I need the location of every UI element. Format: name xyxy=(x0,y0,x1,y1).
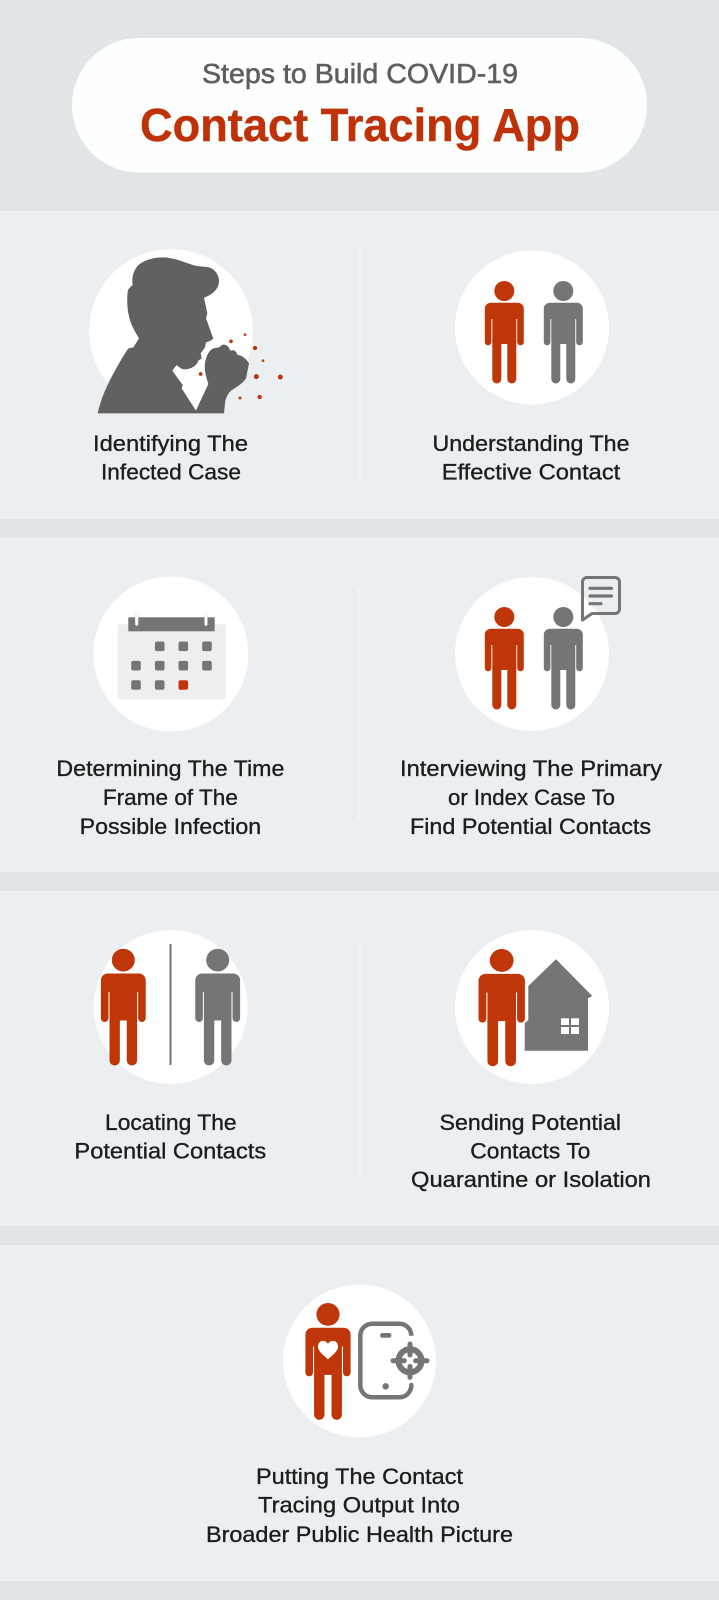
panel: row 4 xyxy=(0,1245,719,1581)
step: putting output into public health picture xyxy=(206,1284,513,1547)
label: Broader Public Health Picture xyxy=(206,1522,513,1547)
label xyxy=(206,1464,513,1547)
label: Sending Potential xyxy=(440,1110,621,1135)
label: Determining The Time xyxy=(56,756,284,781)
label xyxy=(74,1110,266,1164)
label: Locating The xyxy=(105,1110,237,1135)
label: Find Potential Contacts xyxy=(410,814,651,839)
label: Frame of The xyxy=(103,785,238,810)
panel: row 2 xyxy=(0,538,719,872)
icon: person with heart and phone with target xyxy=(283,1284,436,1438)
label: or Index Case To xyxy=(448,785,615,810)
label: Contacts To xyxy=(470,1139,590,1164)
icon: coughing man xyxy=(89,249,283,413)
icon: two people xyxy=(455,250,609,404)
title: subtitle line: Steps to Build COVID-19 xyxy=(202,58,518,89)
label xyxy=(432,431,630,484)
step: sending contacts to quarantine xyxy=(411,930,651,1192)
title banner xyxy=(72,38,647,172)
icon: calendar xyxy=(93,576,248,732)
label: Identifying The xyxy=(93,431,248,456)
label xyxy=(56,756,284,839)
icon: person and house xyxy=(455,930,609,1084)
label: Putting The Contact xyxy=(256,1464,464,1489)
icon: two people with speech bubble xyxy=(455,577,620,731)
label xyxy=(411,1110,651,1192)
title: main heading: Contact Tracing App xyxy=(140,99,580,151)
step: determining the time frame xyxy=(56,576,284,839)
panel: row 3 xyxy=(0,891,719,1226)
step: locating the potential contacts xyxy=(74,930,266,1164)
label: Quarantine or Isolation xyxy=(411,1167,651,1192)
step: understanding the effective contact xyxy=(432,250,630,484)
label: Potential Contacts xyxy=(74,1139,266,1164)
label: Effective Contact xyxy=(442,460,621,484)
label: Interviewing The Primary xyxy=(400,756,663,781)
label: Understanding The xyxy=(432,431,630,456)
label: Infected Case xyxy=(101,460,241,484)
label xyxy=(93,431,248,484)
label: Possible Infection xyxy=(80,814,261,839)
step: interviewing the primary case xyxy=(400,577,663,839)
icon: two people separated by a line xyxy=(94,930,248,1084)
step: identifying the infected case xyxy=(89,249,283,484)
panel: row 1 xyxy=(0,211,719,519)
label: Tracing Output Into xyxy=(258,1492,460,1518)
label xyxy=(400,756,663,839)
